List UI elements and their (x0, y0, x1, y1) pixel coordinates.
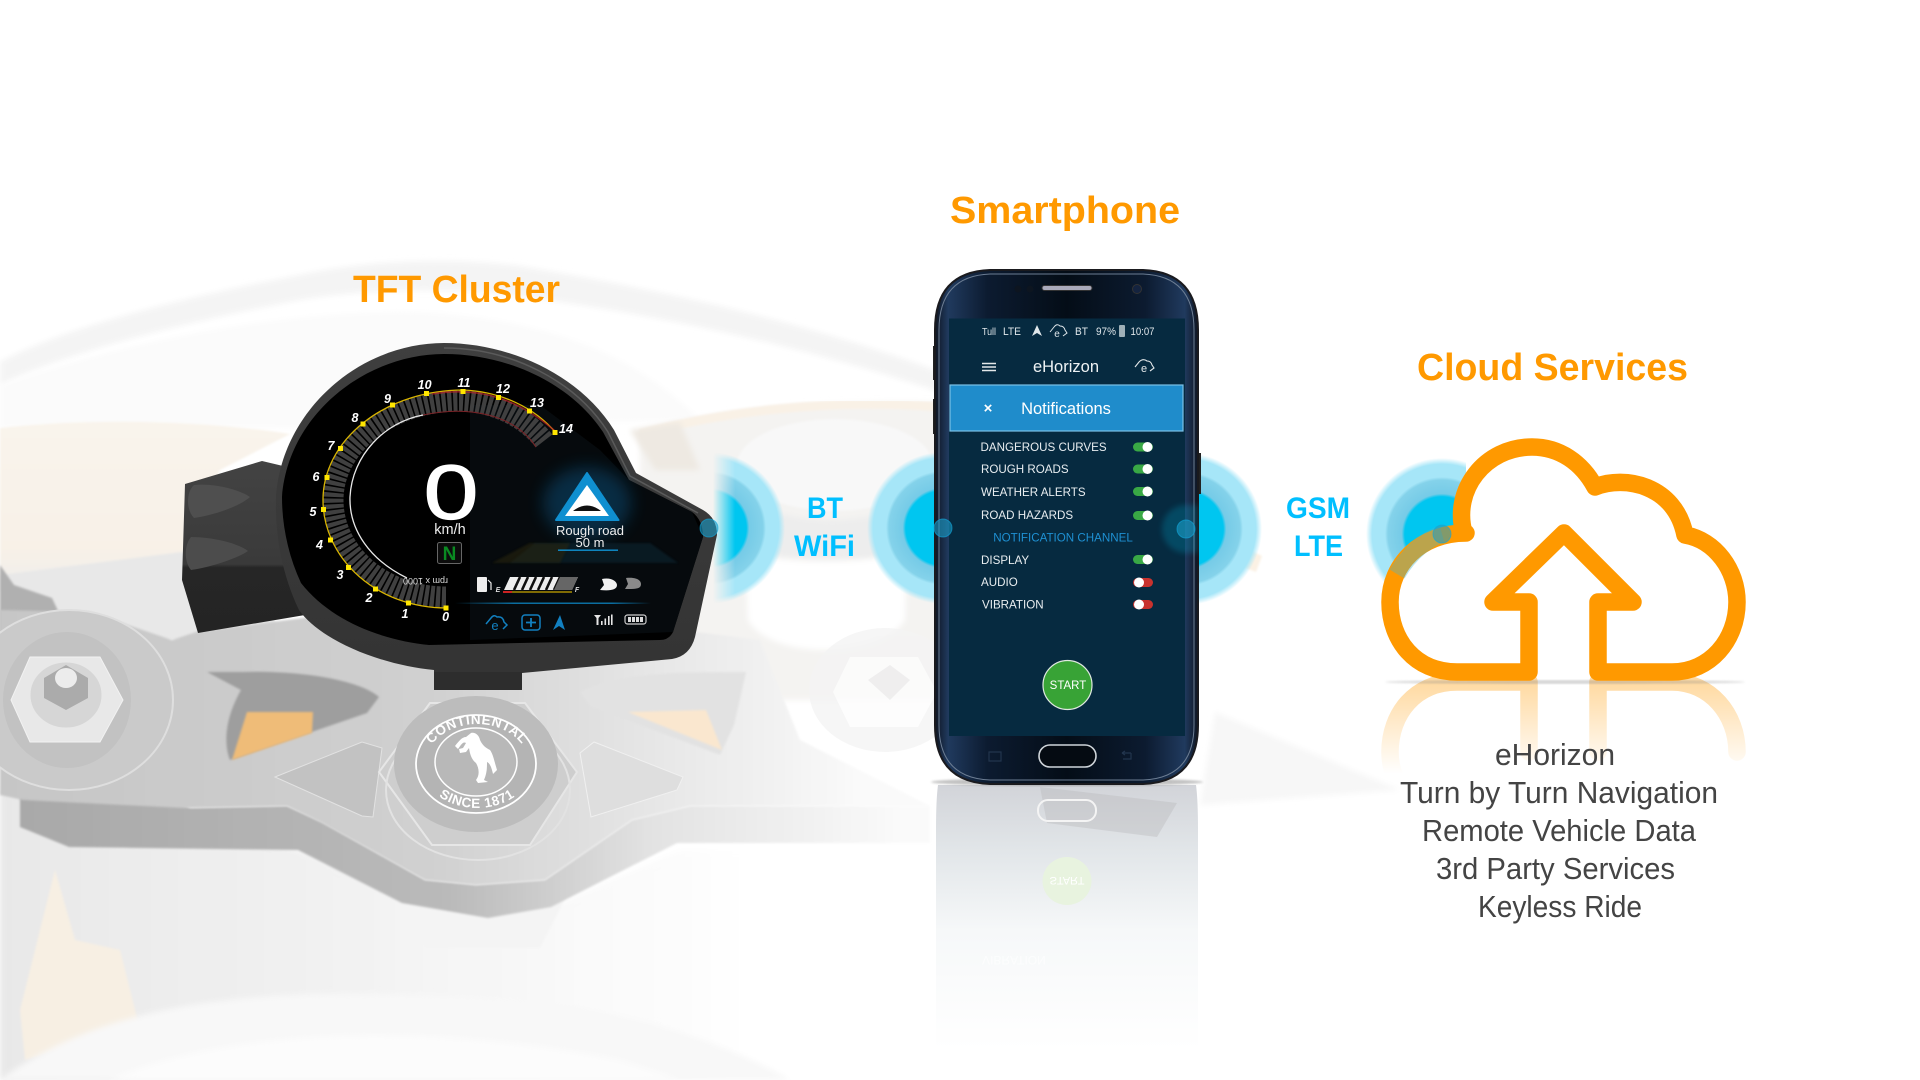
ring outer (416, 715, 536, 813)
plus icon (522, 615, 540, 630)
home button (1039, 745, 1096, 767)
fuel baseline yellow (512, 591, 572, 593)
fuel full label: F (575, 587, 580, 594)
sensor 2 (1026, 286, 1034, 292)
rpm numerals: 12 (496, 382, 510, 396)
clock: 10:07 (1130, 326, 1154, 338)
bolt right head (868, 665, 910, 700)
notifications header (950, 385, 1183, 431)
orange lower left (20, 870, 140, 1060)
screen (282, 354, 703, 645)
fuel pump (477, 577, 491, 592)
cloud services list (1400, 737, 1718, 924)
bolt right hex (833, 657, 937, 727)
list item: Remote Vehicle Data (1422, 813, 1697, 848)
plus glyph (526, 618, 536, 627)
cloud upload icon (1390, 447, 1737, 672)
row: WEATHER ALERTS (981, 486, 1086, 499)
bolt head (44, 665, 88, 710)
headlight grey (625, 578, 641, 589)
reflection rows: VIBRATION (982, 953, 1046, 967)
rpm numerals: 6 (313, 470, 321, 484)
side pod (182, 461, 305, 633)
pod button bottom (186, 537, 248, 570)
row: ROUGH ROADS (981, 463, 1069, 476)
right grey wedge (1200, 712, 1400, 805)
nav arrow (553, 615, 565, 630)
cloud icon (1135, 360, 1154, 375)
phone left dot (934, 519, 952, 537)
pod button top (188, 485, 250, 518)
sensors (1014, 286, 1022, 292)
right cutout (580, 672, 746, 755)
light grey strip (0, 552, 300, 640)
green toggles (1133, 442, 1153, 564)
cloud reflection (1390, 682, 1737, 821)
hazard label: Rough road (556, 523, 624, 538)
smartphone device (933, 270, 1201, 784)
housing (276, 343, 717, 690)
fuel scale (504, 577, 578, 590)
hazard distance: 50 m (576, 535, 604, 550)
body highlight (939, 274, 1194, 780)
BT WiFi label: BT (807, 492, 843, 525)
TFT Cluster title: TFT Cluster (353, 269, 560, 311)
cylinder shade (740, 490, 935, 560)
percent: 97% (1096, 326, 1116, 338)
cloud services list: eHorizon (1495, 737, 1615, 772)
gear indicator (438, 542, 462, 565)
red toggles (1133, 578, 1153, 610)
signal waves: phone right (1199, 455, 1262, 604)
LTE: LTE (1294, 530, 1343, 563)
signal waves: phone left (868, 454, 934, 603)
rpm numerals: 10 (418, 378, 432, 392)
back keys (989, 751, 1131, 761)
rpm numerals: 9 (384, 392, 391, 406)
toggle rows (980, 441, 1133, 612)
phone right glow (1162, 505, 1198, 553)
close: × (984, 400, 993, 417)
e: e (1054, 329, 1060, 340)
rpm numerals: 4 (315, 538, 323, 552)
bolt collar (30, 662, 102, 728)
rpm numerals: 14 (559, 422, 573, 436)
speed: 0 (424, 449, 478, 536)
header text: Notifications (1021, 400, 1111, 418)
left diamond (275, 742, 382, 817)
camera (1132, 284, 1142, 294)
rpm numerals: 3 (337, 568, 344, 582)
left orange (232, 712, 313, 760)
tick dots (321, 389, 558, 610)
row: ROAD HAZARDS (981, 509, 1073, 522)
start text: START (1050, 680, 1086, 692)
fuel labels: E (496, 587, 501, 594)
connection dot (700, 519, 718, 537)
hamburger (982, 364, 996, 370)
rev label: rpm x 1000 (403, 576, 448, 586)
triangle inner (565, 485, 609, 516)
triple clamp plate (0, 600, 930, 885)
beige arc (640, 404, 940, 434)
status bar (982, 325, 1154, 340)
e: e (1141, 363, 1147, 375)
orange tip (630, 422, 700, 470)
toggle rows: DANGEROUS CURVES (980, 441, 1107, 454)
low grey area (0, 790, 860, 1080)
cylinder top (737, 419, 933, 511)
Smartphone title: Smartphone (950, 190, 1180, 232)
rpm numerals: 8 (352, 411, 359, 425)
bolt centre (55, 668, 77, 688)
row heading: NOTIFICATION CHANNEL (993, 532, 1133, 544)
white cup (745, 550, 907, 650)
phone right dot (1177, 520, 1195, 538)
signal bars (601, 614, 613, 625)
windscreen haze (0, 312, 700, 428)
GSM LTE label (1286, 492, 1350, 563)
cloud lobe interior (1390, 533, 1530, 672)
bolt hex (11, 657, 123, 742)
rpm numerals: 7 (328, 439, 336, 453)
disc inner (3, 632, 131, 768)
fuel baseline (503, 591, 512, 593)
list item: 3rd Party Services (1436, 851, 1675, 886)
dark band (20, 722, 930, 918)
lower white clearing (960, 420, 1300, 700)
cloud shadow (1385, 680, 1745, 684)
screen (949, 318, 1185, 736)
nut collar (386, 720, 570, 860)
rpm numerals (310, 376, 573, 624)
row: DISPLAY (981, 554, 1029, 567)
grid left tint (492, 543, 570, 563)
battery cells (628, 617, 643, 622)
cloud tint over stroke (1397, 534, 1442, 574)
signal waves: cluster (714, 454, 784, 602)
speed unit: km/h (434, 522, 466, 538)
cloud (1050, 325, 1067, 336)
yellow arc (323, 390, 556, 608)
tank panel right arc (640, 402, 1000, 700)
brand text bottom: SINCE 1871 (440, 790, 514, 808)
lower arc inner (110, 1035, 680, 1080)
inner white arc (350, 415, 423, 578)
pump hose (488, 580, 491, 590)
rpm numerals: 5 (310, 505, 318, 519)
rpm numerals: 13 (530, 396, 544, 410)
hazard line (558, 550, 618, 551)
phone reflection (936, 785, 1198, 1075)
lever silhouette (0, 565, 100, 660)
batt (1119, 325, 1125, 337)
right orange (628, 710, 722, 750)
horse (455, 733, 497, 783)
cloud e glyph: e (491, 618, 499, 633)
phone body (935, 270, 1198, 784)
rpm numerals: 1 (402, 607, 409, 621)
warning triangle (556, 473, 618, 520)
side buttons (933, 346, 1201, 494)
start button (1043, 660, 1092, 710)
reflection wedge (1040, 787, 1177, 837)
signal waves: cloud (1366, 458, 1466, 582)
list item: Keyless Ride (1478, 889, 1642, 924)
row: AUDIO (981, 576, 1018, 589)
screen right panel tint (470, 405, 703, 640)
bt: BT (1075, 326, 1088, 338)
left cutout (207, 672, 379, 760)
cloud dot (1433, 525, 1451, 543)
BT WiFi label (794, 492, 855, 563)
inner red arc (423, 411, 536, 447)
road hazard glow (543, 467, 631, 539)
phone shadow (931, 778, 1203, 786)
tank panel left (0, 422, 290, 590)
list item: Turn by Turn Navigation (1400, 775, 1718, 810)
cap (394, 696, 558, 832)
app title: eHorizon (1033, 358, 1099, 376)
Continental badge nut (378, 696, 576, 861)
rpm numerals: 11 (458, 376, 471, 390)
gear letter: N (443, 544, 456, 565)
status bar: Tull (982, 327, 996, 338)
Cloud Services title: Cloud Services (1417, 347, 1688, 389)
perspective grid (510, 543, 678, 563)
tab (434, 672, 522, 690)
lte: LTE (1003, 326, 1021, 338)
cloud e icon (486, 616, 507, 633)
status divider (455, 602, 651, 604)
housing rim (444, 348, 698, 513)
hex shadow (390, 893, 568, 948)
red arc (432, 392, 555, 431)
battery icon (625, 615, 646, 624)
rpm numerals: 0 (442, 610, 449, 624)
WiFi: WiFi (794, 530, 855, 563)
right diamond (580, 742, 683, 817)
signal icon (594, 614, 613, 625)
ring inner (435, 728, 517, 796)
arrow (1032, 325, 1042, 336)
reflection home button (1038, 800, 1096, 821)
row: VIBRATION (982, 598, 1044, 612)
rpm numerals: 2 (365, 591, 373, 605)
TFT cluster device (182, 343, 718, 690)
reflection start text: START (1049, 874, 1085, 886)
left fork disc (0, 610, 173, 790)
bump (573, 506, 601, 511)
windshield ribbon (0, 261, 940, 392)
earpiece (1042, 286, 1092, 290)
fuel gaps (514, 577, 560, 590)
reflection start button (1042, 857, 1092, 905)
orange ghost (1198, 525, 1262, 572)
GSM LTE label: GSM (1286, 492, 1350, 525)
lower arcs (0, 993, 790, 1080)
brand text top: CONTINENTAL (427, 716, 525, 744)
fuel empty section (554, 577, 578, 590)
bolt right (809, 628, 961, 752)
headlight white (600, 579, 617, 590)
tachometer band (333, 401, 544, 597)
